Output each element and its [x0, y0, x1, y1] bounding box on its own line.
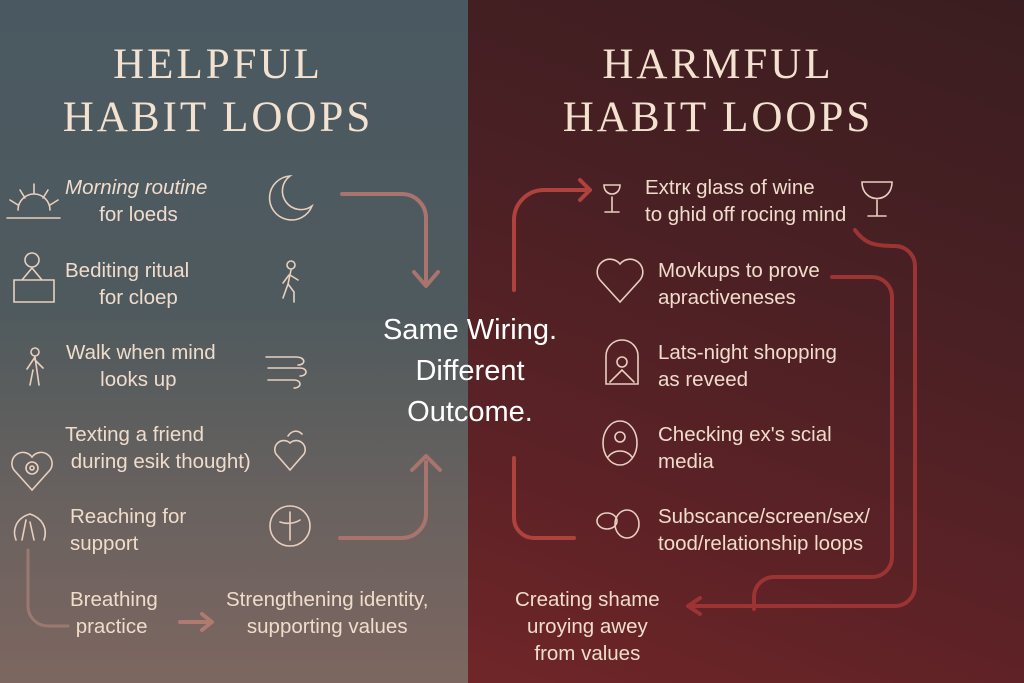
icon: moon: [270, 176, 312, 220]
item: wine: Extrк glass of wine: [645, 176, 815, 199]
item: texting: Texting a friend: [65, 423, 204, 446]
title: harmful: [563, 41, 873, 141]
item: bediting ritual: for cloep: [99, 286, 178, 309]
arrow: breathing loop: [28, 550, 68, 626]
item: shopping: Lats-night shopping: [658, 341, 837, 364]
icon: walker: [27, 348, 43, 385]
icon: wind: [266, 357, 306, 388]
arrow: helpful bottom: [340, 456, 440, 538]
icon: profile circle: [603, 421, 637, 465]
item: loops: tood/relationship loops: [658, 532, 863, 555]
item: reaching: Reaching for: [70, 505, 186, 528]
item: bediting ritual: Bediting ritual: [65, 259, 189, 282]
item: walk: [66, 341, 216, 391]
arrow: harmful left loop: [514, 180, 590, 538]
title: helpful: HELPFUL: [113, 41, 323, 88]
item: breathing: practice: [76, 615, 147, 638]
item: hookups: Movkups to prove: [658, 259, 820, 282]
item: checking ex: media: [658, 450, 714, 473]
outcome: helpful: supporting values: [247, 615, 408, 638]
center statement: Outcome.: [407, 396, 533, 428]
item: texting: [65, 423, 251, 473]
item: texting: during esik thought): [71, 450, 251, 473]
outcome: helpful: [226, 588, 428, 638]
arrow: helpful top: [342, 194, 438, 286]
icon: leaf circle: [270, 506, 310, 546]
icon: small wine glass: [604, 185, 620, 212]
outcome: harmful: from values: [534, 642, 640, 665]
arrow: harmful right loop: [688, 230, 915, 614]
item: loops: Subscance/screen/sex/: [658, 505, 870, 528]
panel: helpful background: [0, 0, 468, 683]
item: reaching: support: [70, 532, 138, 555]
arrow: to outcome: [180, 614, 212, 630]
item: breathing: Breathing: [70, 588, 158, 611]
item: wine: to ghid off rocing mind: [645, 203, 846, 226]
center statement: [383, 314, 557, 428]
harmful list: [645, 176, 870, 555]
item: bediting ritual: [65, 259, 189, 309]
item: breathing: [70, 588, 158, 638]
icon: sunrise: [7, 184, 60, 218]
item: hookups: [658, 259, 820, 309]
center statement: Different: [415, 355, 525, 387]
item: loops: [658, 505, 870, 555]
helpful list: [65, 176, 251, 638]
icon: wine glass: [862, 182, 892, 216]
item: checking ex: [658, 423, 832, 473]
icon: pills: [597, 510, 639, 538]
icon: heart: [597, 259, 643, 302]
title: harmful: HARMFUL: [602, 41, 834, 88]
title: harmful: HABIT LOOPS: [563, 94, 873, 141]
item: morning routine: Morning routine: [65, 176, 207, 199]
icon: runner: [283, 261, 298, 302]
icon: spiral heart: [12, 452, 52, 490]
icon: portrait: [606, 340, 638, 384]
item: shopping: as reveed: [658, 368, 748, 391]
title: helpful: [63, 41, 373, 141]
item: reaching: [70, 505, 186, 555]
panel: harmful background: [468, 0, 1024, 683]
center statement: Same Wiring.: [383, 314, 557, 346]
title: helpful: HABIT LOOPS: [63, 94, 373, 141]
outcome: helpful: Strengthening identity,: [226, 588, 428, 611]
item: walk: looks up: [100, 368, 177, 391]
item: morning routine: [65, 176, 207, 226]
item: morning routine: for loeds: [99, 203, 178, 226]
item: wine: [645, 176, 846, 226]
icon: hands: [15, 514, 45, 540]
outcome: harmful: Creating shame: [515, 588, 660, 611]
item: walk: Walk when mind: [66, 341, 216, 364]
outcome: harmful: uroying awey: [527, 615, 648, 638]
item: checking ex: Checking ex's scial: [658, 423, 832, 446]
outcome: harmful: [515, 588, 660, 665]
item: hookups: apractiveneses: [658, 286, 796, 309]
item: shopping: [658, 341, 837, 391]
icon: peach heart: [275, 431, 305, 470]
icon: person desk: [14, 253, 54, 302]
